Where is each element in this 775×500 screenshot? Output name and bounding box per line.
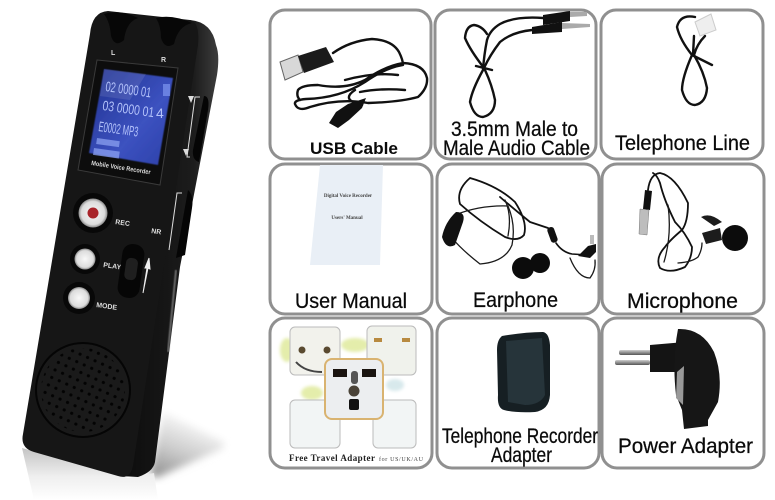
- channel labels: [111, 50, 166, 64]
- label: User Manual: [295, 290, 407, 313]
- panel: earphone: [437, 164, 599, 314]
- icon: telephone cable: [677, 14, 716, 105]
- label: Power Adapter: [618, 435, 753, 458]
- slider arrow: [143, 258, 150, 293]
- label: Microphone: [627, 290, 738, 313]
- label: Telephone Line: [615, 132, 750, 155]
- universal adapter: [325, 359, 383, 419]
- icon: manual booklet: Digital Voice Recorder: [324, 194, 373, 199]
- icon: USB cable: [280, 39, 427, 128]
- mode label: MODE: [96, 302, 118, 312]
- front of body: [22, 11, 198, 477]
- label: [442, 425, 598, 467]
- NR label: NR: [151, 228, 162, 236]
- LCD bezel: [78, 60, 178, 185]
- channel labels: L: [111, 50, 116, 57]
- adapter bottom right: [373, 400, 416, 448]
- side of body: [120, 20, 218, 477]
- mode button: [63, 282, 95, 314]
- label: USB Cable: [310, 139, 398, 158]
- LCD screen: [89, 69, 173, 165]
- play label: PLAY: [103, 262, 122, 272]
- voice recorder device: [22, 11, 224, 500]
- adapter bottom left: [290, 400, 340, 448]
- icon: recorder adapter: [497, 332, 550, 412]
- icon: manual booklet: Users' Manual: [331, 216, 363, 221]
- microphone bumps: [104, 12, 192, 46]
- floor shadow: [150, 412, 224, 478]
- play button: [70, 244, 100, 274]
- side highlight: [168, 270, 176, 352]
- panel: telephone line: [601, 10, 763, 159]
- LCD screen: E0002 MP3: [98, 118, 140, 140]
- panel: USB cable: [270, 10, 431, 159]
- LCD screen: 03 0000 01: [102, 97, 155, 120]
- side control: NR: [169, 190, 192, 258]
- icon: earphones: [442, 178, 596, 279]
- icon: audio cable: [465, 11, 590, 117]
- icon: manual booklet: [310, 165, 383, 265]
- label: [443, 118, 590, 160]
- side control: skip: [183, 96, 208, 162]
- speaker grille: [36, 343, 130, 437]
- panel: travel adapter: [270, 318, 432, 468]
- channel labels: R: [161, 57, 166, 64]
- panel: telephone recorder adapter: [437, 318, 599, 468]
- LCD screen: 02 0000 01: [105, 78, 152, 100]
- panel: power adapter: [602, 318, 764, 468]
- panel: microphone: [602, 164, 764, 314]
- label: Male Audio Cable: [443, 137, 590, 160]
- label: Earphone: [473, 289, 558, 312]
- adapter top right: [367, 326, 416, 375]
- record button: [73, 193, 113, 233]
- adapter top left: [290, 327, 340, 375]
- map background: [280, 338, 404, 400]
- LCD screen: 4: [156, 105, 164, 121]
- record label: REC: [115, 219, 130, 228]
- label: 3.5mm Male to: [451, 118, 578, 141]
- model caption: Mobile Voice Recorder: [91, 160, 151, 176]
- icon: lavalier microphone: [639, 173, 748, 271]
- panel: user manual: [270, 164, 432, 314]
- panel: audio cable: [435, 10, 596, 160]
- caption: Free Travel Adapter: [289, 453, 375, 463]
- icon: power adapter: [615, 329, 720, 429]
- caption: [289, 453, 424, 463]
- floor reflection: [22, 448, 158, 500]
- label: Telephone Recorder: [442, 425, 598, 448]
- caption: for US/UK/AU: [379, 456, 424, 463]
- slide switch: [116, 243, 146, 299]
- label: Adapter: [491, 444, 552, 467]
